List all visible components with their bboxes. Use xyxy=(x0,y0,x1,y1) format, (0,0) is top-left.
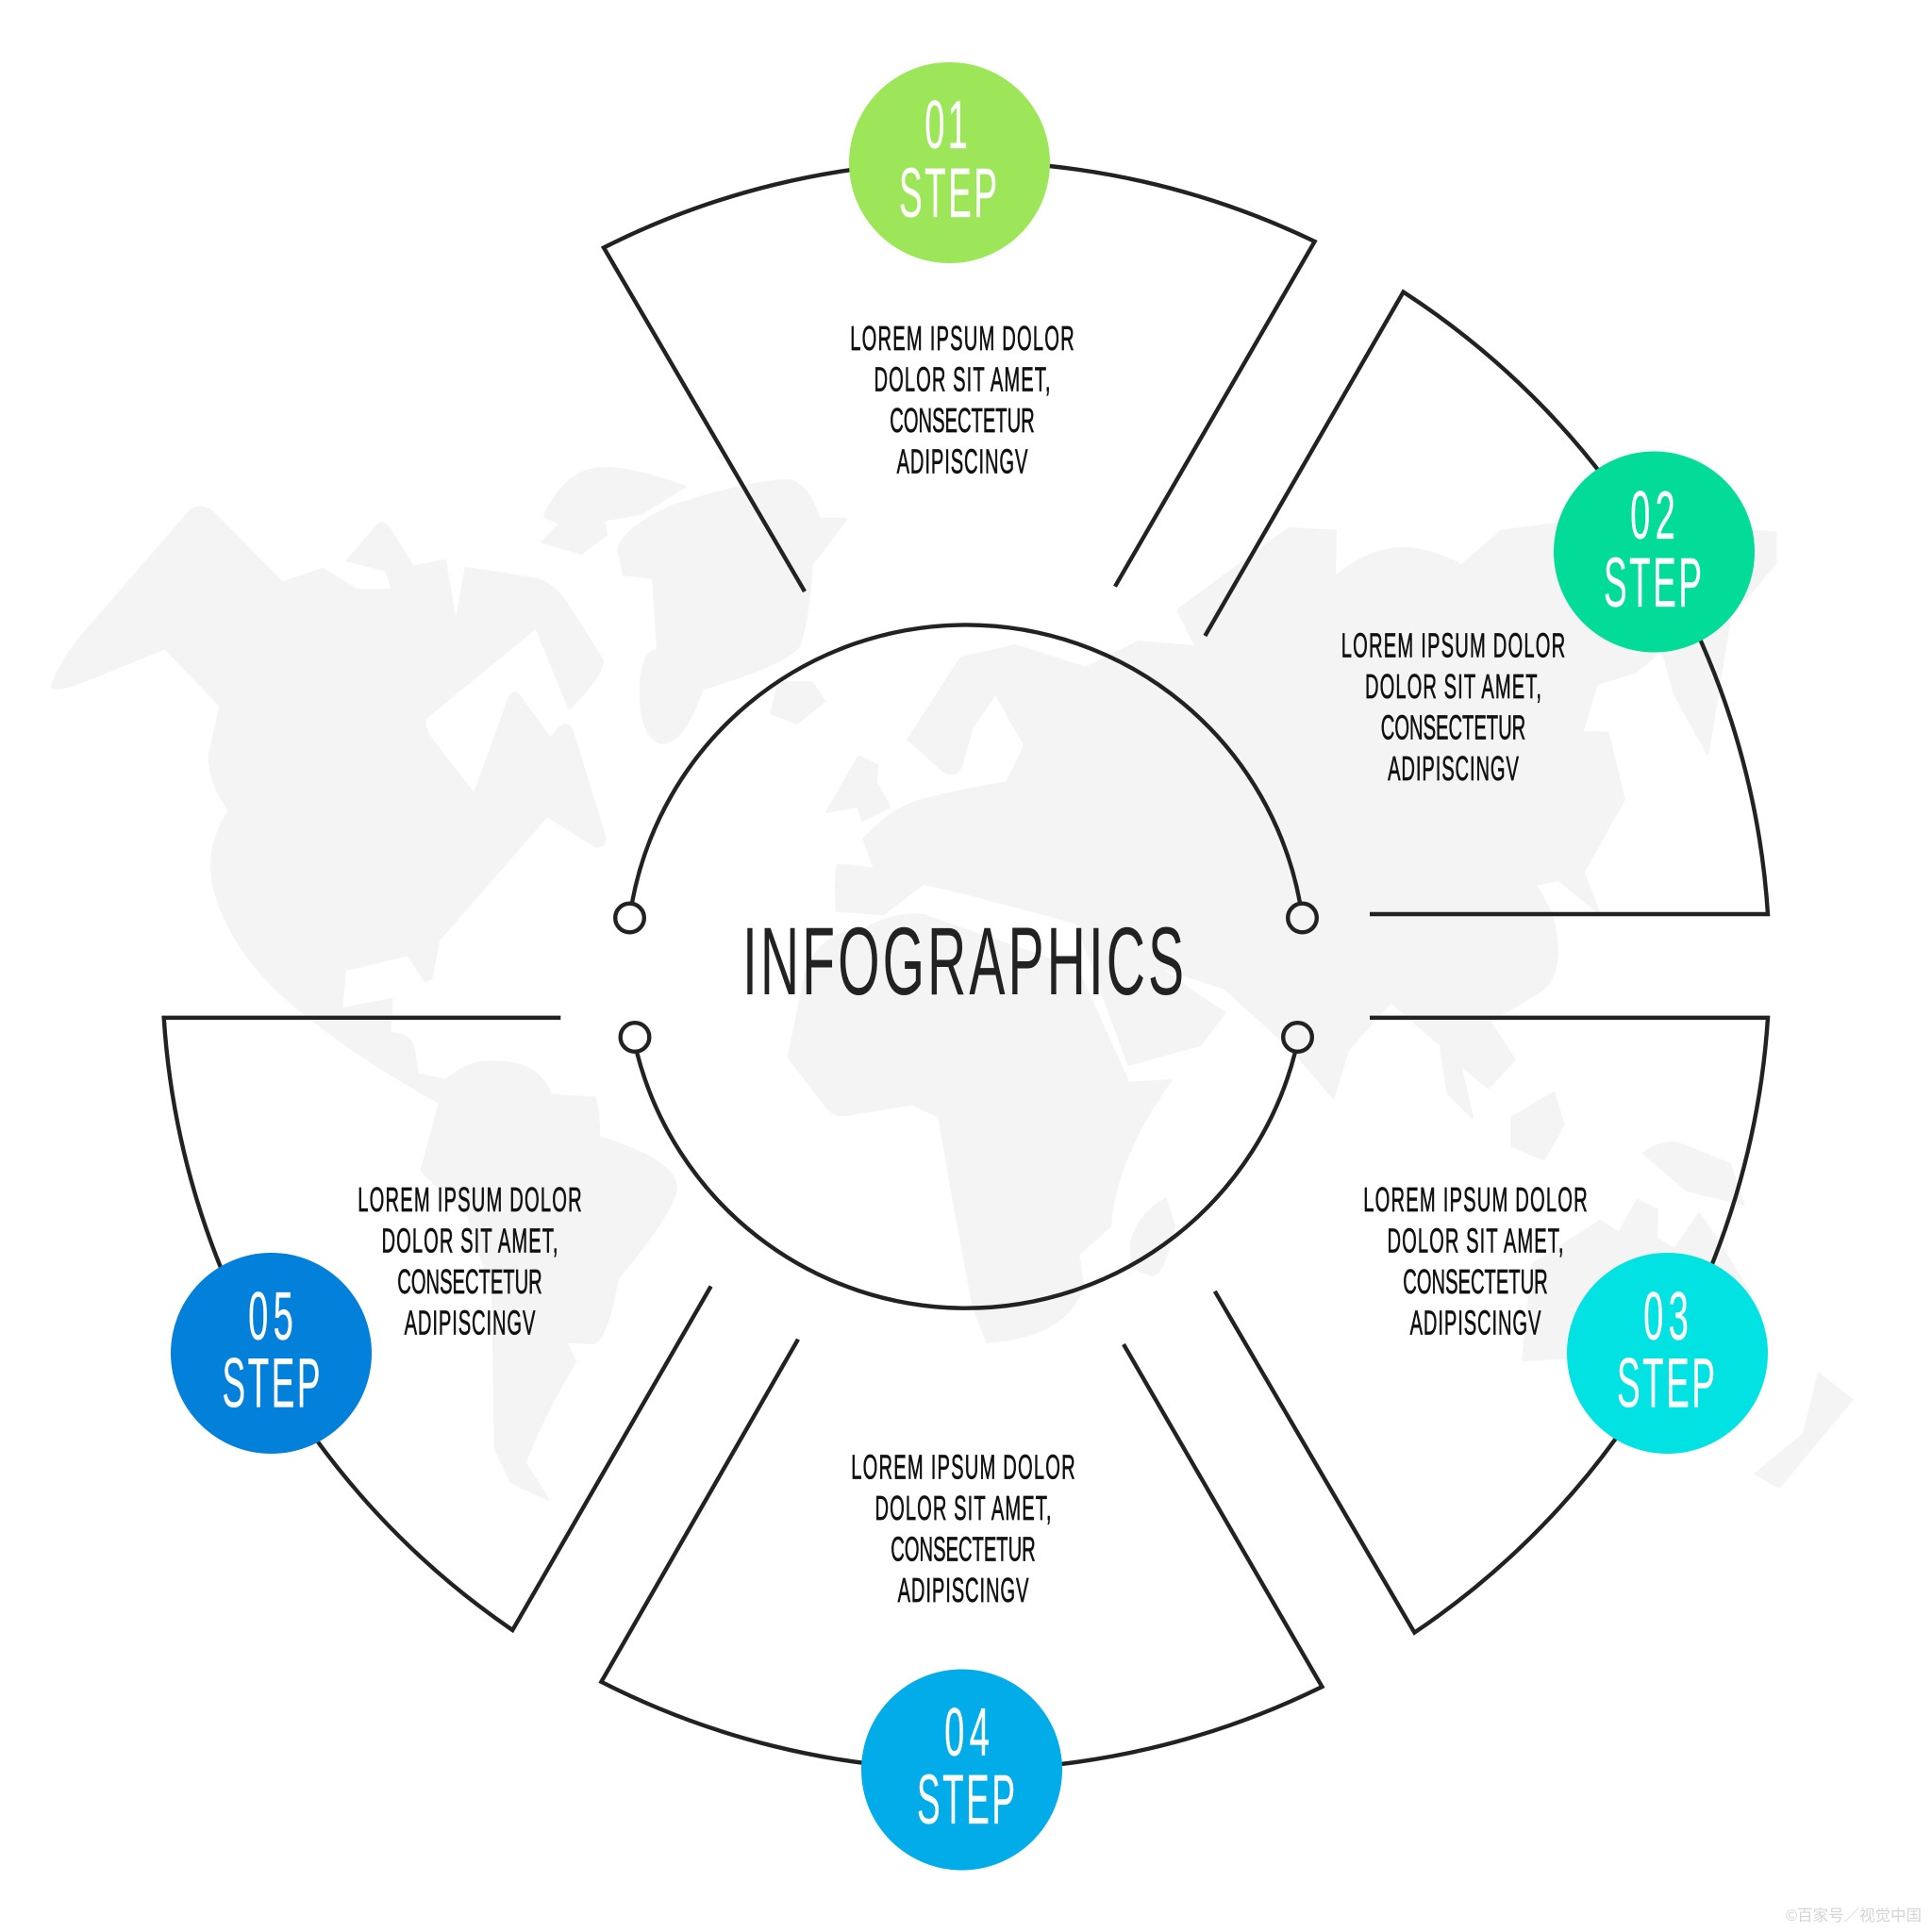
text block: step 04 xyxy=(851,1450,1075,1610)
text block: step 05: CONSECTETUR xyxy=(397,1264,542,1302)
text block: step 02: DOLOR SIT AMET, xyxy=(1365,669,1541,707)
map: New Zealand xyxy=(1756,1374,1852,1487)
text block: step 04: DOLOR SIT AMET, xyxy=(874,1491,1052,1528)
text block: step 04: LOREM IPSUM DOLOR xyxy=(851,1450,1075,1487)
map: Africa xyxy=(789,915,1171,1341)
text block: step 02 xyxy=(1341,628,1565,789)
text block: step 01: CONSECTETUR xyxy=(890,403,1035,441)
text block: step 01: LOREM IPSUM DOLOR xyxy=(850,321,1074,358)
title: INFOGRAPHICS xyxy=(742,907,1184,1015)
step 05 badge: 05 xyxy=(248,1279,293,1355)
step 04 badge: STEP xyxy=(917,1761,1015,1839)
step 01 badge: 01 xyxy=(924,88,968,163)
step 01 badge: STEP xyxy=(899,155,997,232)
text block: step 01: DOLOR SIT AMET, xyxy=(874,362,1051,399)
panel: step 05 outline xyxy=(164,1018,711,1630)
centre ring: upper arc with end dots xyxy=(615,625,1317,932)
step 02 badge: 02 xyxy=(1630,478,1675,554)
watermark: ©百家号／视觉中国 xyxy=(1786,1907,1922,1924)
text block: step 03: CONSECTETUR xyxy=(1403,1264,1548,1302)
background world map xyxy=(52,468,1852,1500)
text block: step 03 xyxy=(1363,1182,1588,1342)
text block: step 05: ADIPISCINGV xyxy=(405,1306,536,1342)
step 04 badge: 04 xyxy=(944,1695,990,1771)
panel: step 02 outline xyxy=(1205,292,1768,914)
text block: step 05: DOLOR SIT AMET, xyxy=(381,1224,558,1260)
panel: step 03 outline xyxy=(1215,1018,1768,1633)
text block: step 05: LOREM IPSUM DOLOR xyxy=(358,1182,582,1220)
text block: step 04: CONSECTETUR xyxy=(891,1532,1036,1569)
map: Madagascar xyxy=(1131,1199,1174,1275)
text block: step 05 xyxy=(358,1182,582,1342)
text block: step 01 xyxy=(850,321,1074,481)
text block: step 03: DOLOR SIT AMET, xyxy=(1387,1224,1564,1260)
step 04 badge xyxy=(861,1670,1062,1870)
step 02 badge xyxy=(1554,451,1755,653)
step 02 badge: STEP xyxy=(1604,544,1702,622)
step 05 badge xyxy=(171,1253,372,1454)
text block: step 02: ADIPISCINGV xyxy=(1388,751,1519,789)
text block: step 03: ADIPISCINGV xyxy=(1410,1306,1541,1342)
map: Eurasia xyxy=(836,524,1775,1118)
text block: step 03: LOREM IPSUM DOLOR xyxy=(1363,1182,1588,1220)
text block: step 02: LOREM IPSUM DOLOR xyxy=(1341,628,1565,665)
map: Iceland xyxy=(772,683,824,724)
map: Australia xyxy=(1523,1200,1750,1380)
map: South-East Asia islands xyxy=(1512,1093,1563,1159)
centre ring: lower arc with end dots xyxy=(621,1023,1312,1308)
step 03 badge xyxy=(1567,1253,1768,1454)
panel: step 04 outline xyxy=(601,1340,1322,1770)
step 03 badge: 03 xyxy=(1643,1279,1689,1355)
step 05 badge: STEP xyxy=(222,1345,321,1423)
text block: step 04: ADIPISCINGV xyxy=(898,1573,1029,1610)
text block: step 02: CONSECTETUR xyxy=(1381,710,1525,747)
map: British Isles xyxy=(826,757,890,821)
panel: step 01 outline xyxy=(604,161,1315,591)
step 01 badge xyxy=(849,62,1050,263)
map: Greenland xyxy=(619,480,846,743)
text block: step 01: ADIPISCINGV xyxy=(897,444,1028,481)
map: New Guinea xyxy=(1643,1142,1743,1204)
map: arctic islands xyxy=(542,468,685,553)
step 03 badge: STEP xyxy=(1617,1345,1715,1423)
map: the Americas xyxy=(52,508,676,1500)
